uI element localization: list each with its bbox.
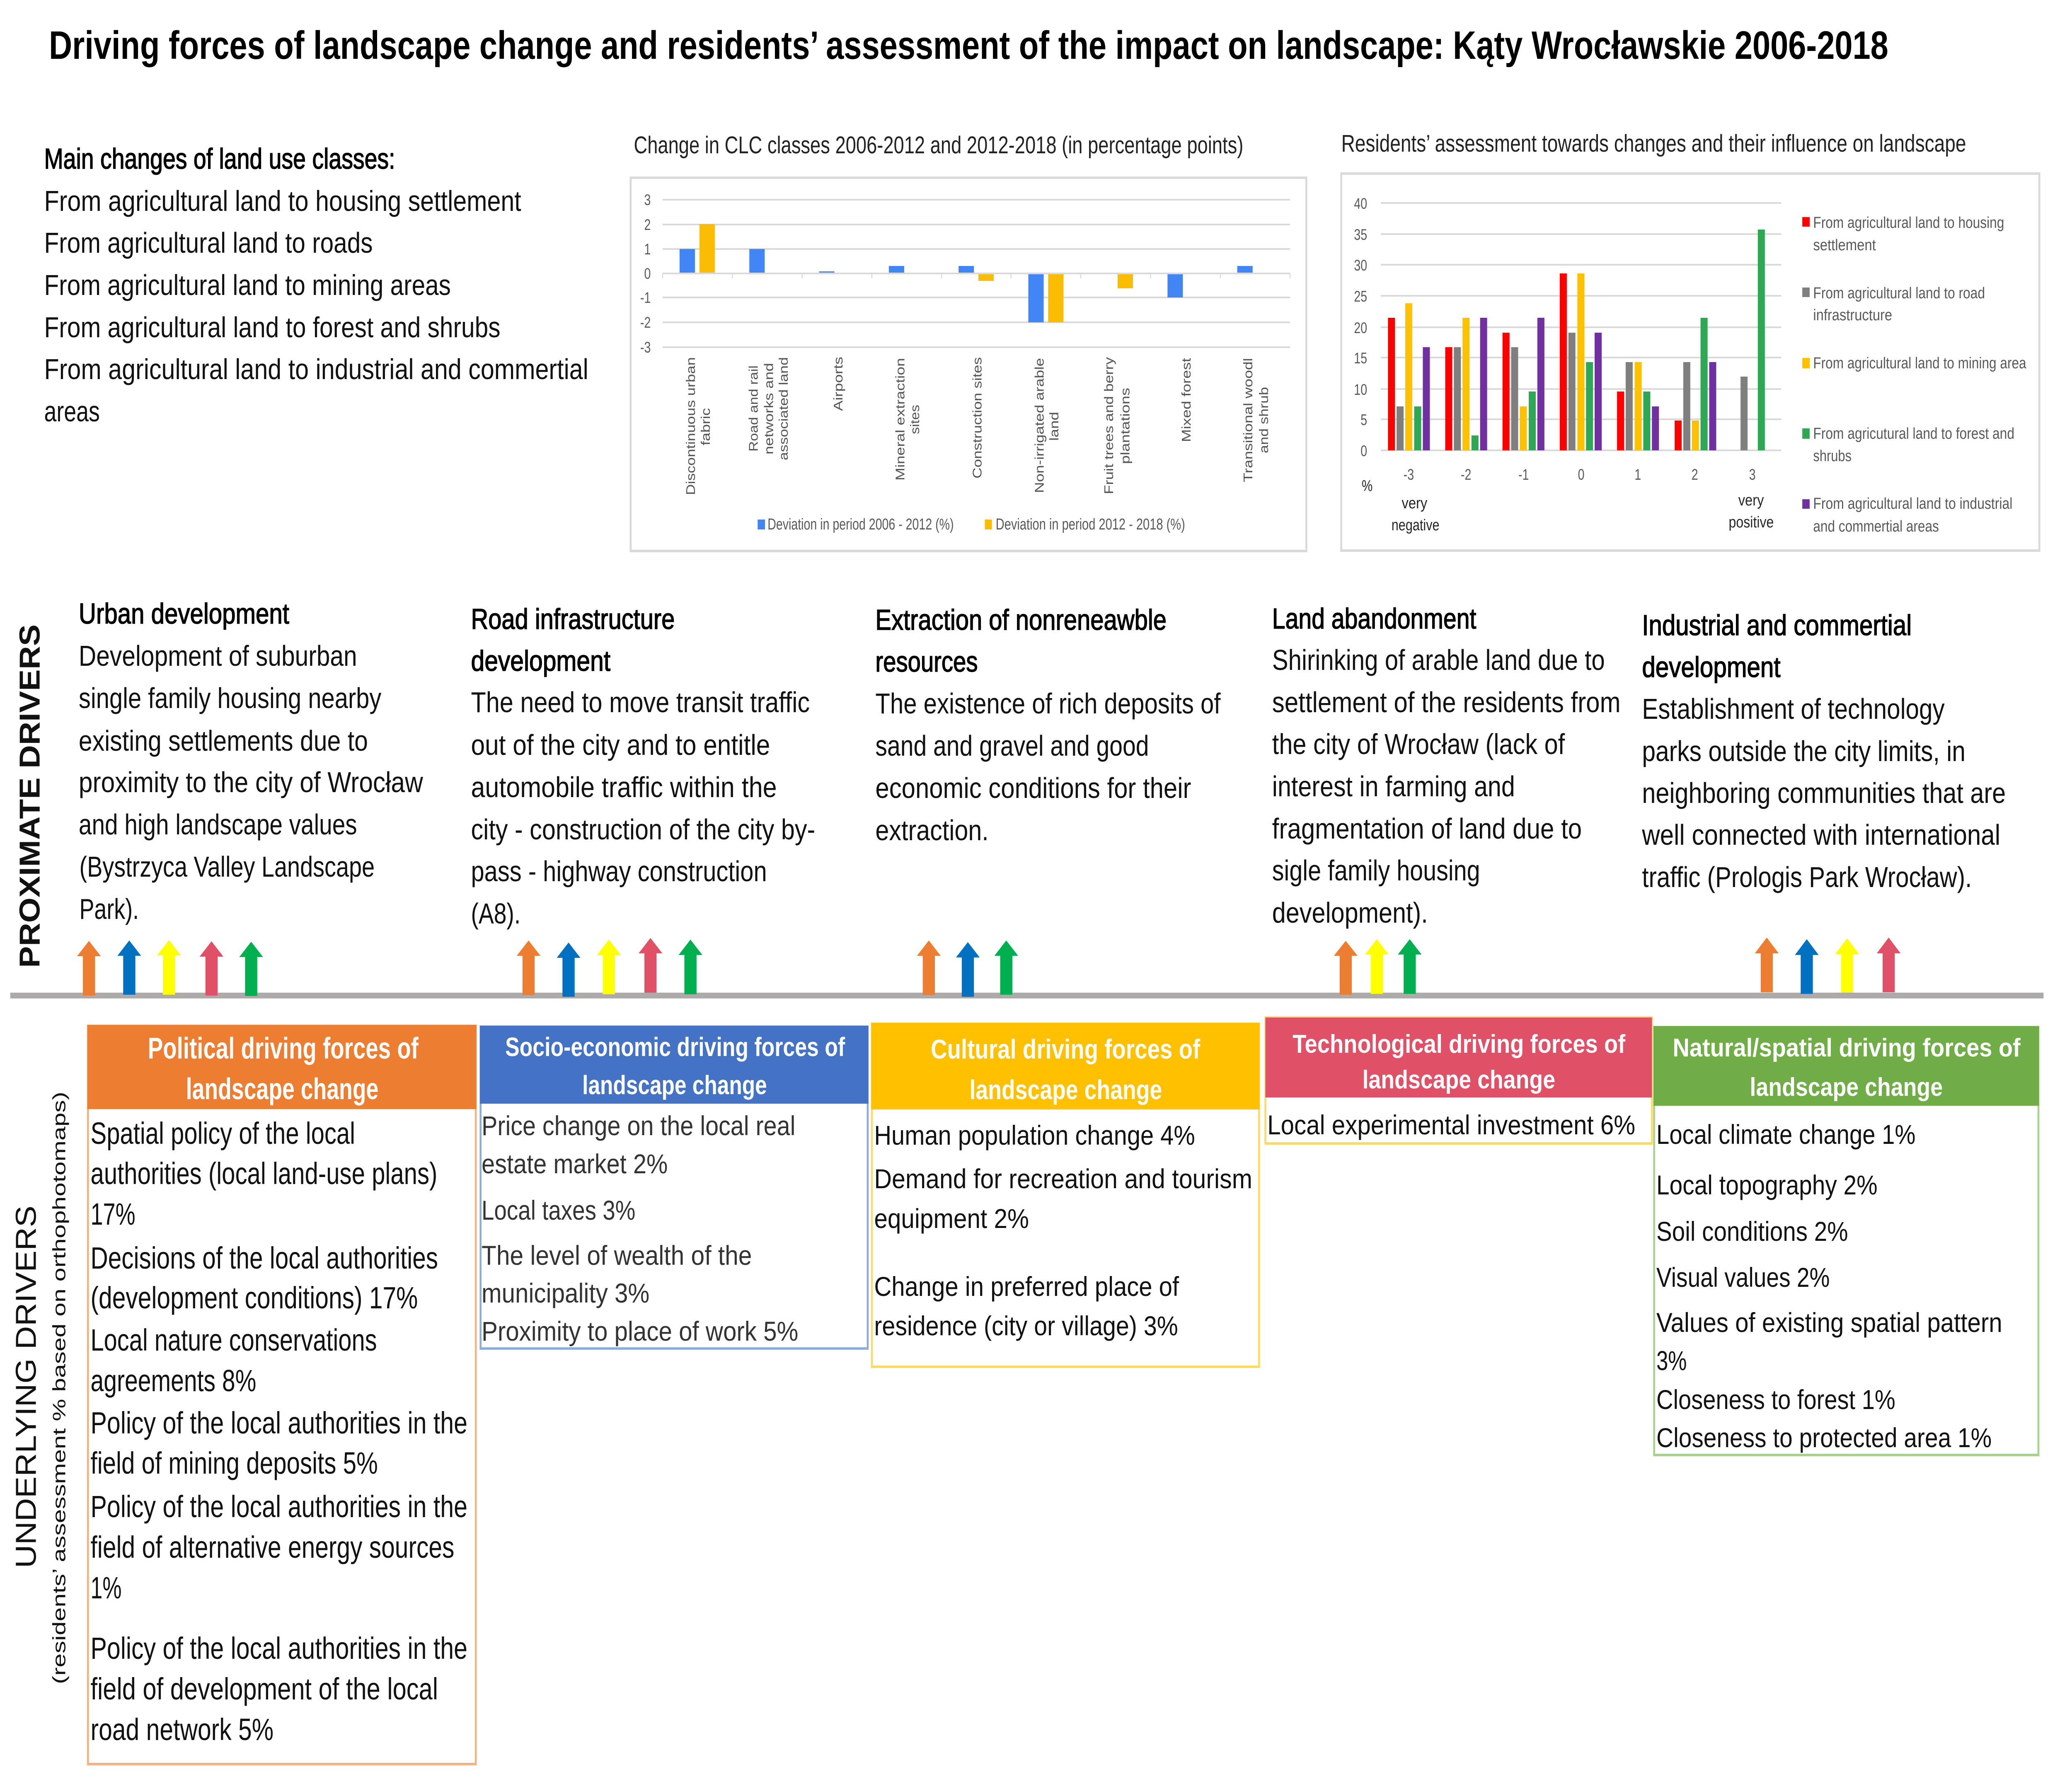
chart title: residents' assessment: Residents’ assessment towards changes and their influence on landscape bbox=[1341, 130, 1966, 157]
panel: political driving forces: Policy of the local authorities in the bbox=[90, 1490, 467, 1524]
bar chart: residents' assessment: 15 bbox=[1354, 350, 1367, 367]
text block: main changes of land use classes: From agricultural land to forest and shrubs bbox=[44, 311, 501, 344]
text block: land abandonment: Land abandonment bbox=[1272, 602, 1476, 635]
text block: main changes of land use classes: From agricultural land to housing settlement bbox=[44, 185, 521, 218]
text block: land abandonment: development). bbox=[1272, 897, 1428, 929]
text block: urban development: Urban development bbox=[79, 597, 289, 630]
panel: natural/spatial driving forces: Natural/spatial driving forces of bbox=[1673, 1033, 2021, 1062]
panel: political driving forces: Political driving forces of bbox=[148, 1032, 419, 1065]
bar chart: change in CLC classes: Fruit trees and berry bbox=[1101, 357, 1116, 494]
panel: technological driving forces bbox=[1266, 1018, 1652, 1143]
bar chart: residents' assessment: positive bbox=[1729, 513, 1774, 531]
bar chart: residents' assessment: From agricutural land to forest and bbox=[1813, 425, 2014, 442]
text block: industrial and commercial development: traffic (Prologis Park Wrocław). bbox=[1642, 861, 1972, 894]
panel: technological driving forces: landscape change bbox=[1363, 1065, 1555, 1094]
bar chart: residents' assessment: 3 bbox=[1749, 466, 1756, 483]
divider line: proximate and underlying drivers bbox=[10, 993, 2043, 998]
bar chart: change in CLC classes: -1 bbox=[640, 290, 651, 307]
panel: natural/spatial driving forces: Values of existing spatial pattern bbox=[1656, 1308, 2002, 1338]
panel: cultural driving forces: Demand for recreation and tourism bbox=[874, 1164, 1252, 1194]
panel: socio-economic driving forces: Local taxes 3% bbox=[482, 1196, 635, 1226]
text block: main changes of land use classes: From agricultural land to mining areas bbox=[44, 269, 451, 302]
panel: natural/spatial driving forces: Soil conditions 2% bbox=[1656, 1217, 1848, 1247]
panel: political driving forces: Policy of the local authorities in the bbox=[90, 1406, 467, 1441]
bar chart: change in CLC classes: fabric bbox=[699, 408, 713, 445]
bar chart: residents' assessment: -3 bbox=[1404, 466, 1414, 483]
panel: natural/spatial driving forces bbox=[1653, 1026, 2039, 1455]
bar chart: change in CLC classes: 0 bbox=[644, 266, 651, 283]
text block: industrial and commercial development: Industrial and commertial bbox=[1642, 609, 1912, 642]
text block: land abandonment: Shirinking of arable land due to bbox=[1272, 644, 1605, 677]
bar chart: change in CLC classes: Deviation in period 2012 - 2018 (%) bbox=[996, 515, 1185, 533]
text block: road infrastructure development: development bbox=[471, 645, 610, 677]
panel: socio-economic driving forces: municipality 3% bbox=[482, 1279, 649, 1309]
text block: extraction of nonrenewable resources: resources bbox=[875, 645, 978, 678]
panel: cultural driving forces: Human population change 4% bbox=[874, 1121, 1195, 1151]
bar chart: change in CLC classes bbox=[631, 178, 1306, 551]
bar chart: residents' assessment: From agricultural land to mining area bbox=[1813, 354, 2026, 372]
bar chart: change in CLC classes: land bbox=[1047, 412, 1061, 441]
bar chart: change in CLC classes: Discontinuous urban bbox=[683, 357, 698, 495]
side label: underlying drivers: UNDERLYING DRIVERS bbox=[10, 1206, 42, 1568]
panel: natural/spatial driving forces: Closeness to protected area 1% bbox=[1656, 1423, 1992, 1453]
panel: socio-economic driving forces: Price change on the local real bbox=[482, 1111, 795, 1141]
panel: political driving forces: landscape change bbox=[186, 1072, 378, 1106]
arrows: urban development bbox=[77, 940, 263, 996]
panel: technological driving forces: Local experimental investment 6% bbox=[1267, 1110, 1635, 1141]
bar chart: residents' assessment: negative bbox=[1392, 516, 1440, 534]
panel: cultural driving forces: landscape change bbox=[969, 1075, 1162, 1105]
bar chart: change in CLC classes: Transitional woodl bbox=[1241, 358, 1255, 482]
text block: urban development: Park). bbox=[79, 893, 139, 926]
panel: socio-economic driving forces: Proximity to place of work 5% bbox=[482, 1317, 798, 1347]
bar chart: change in CLC classes: plantations bbox=[1118, 388, 1132, 464]
panel: natural/spatial driving forces: Visual values 2% bbox=[1656, 1263, 1830, 1293]
bar chart: residents' assessment: From agricultural land to housing bbox=[1813, 214, 2004, 232]
bar chart: change in CLC classes: associated land bbox=[776, 357, 791, 460]
bar chart: change in CLC classes: 2 bbox=[644, 217, 651, 234]
bar chart: change in CLC classes: sites bbox=[908, 405, 922, 434]
panel: political driving forces: road network 5% bbox=[90, 1713, 274, 1747]
bar chart: change in CLC classes: and shrub bbox=[1256, 387, 1271, 453]
bar chart: change in CLC classes: Mixed forest bbox=[1179, 358, 1193, 442]
panel: cultural driving forces bbox=[871, 1023, 1260, 1367]
bar chart: change in CLC classes: Construction sites bbox=[970, 357, 985, 479]
text block: urban development: and high landscape values bbox=[79, 808, 357, 841]
text block: road infrastructure development: automobile traffic within the bbox=[471, 771, 777, 804]
panel: political driving forces: agreements 8% bbox=[90, 1364, 256, 1398]
bar chart: change in CLC classes: Deviation in period 2006 - 2012 (%) bbox=[767, 515, 954, 533]
text block: extraction of nonrenewable resources: The existence of rich deposits of bbox=[875, 687, 1221, 720]
text block: urban development bbox=[79, 597, 424, 926]
text block: industrial and commercial development bbox=[1641, 609, 2006, 894]
chart title: change in CLC classes: Change in CLC classes 2006-2012 and 2012-2018 (in percentage points) bbox=[634, 131, 1243, 158]
text block: road infrastructure development: pass - highway construction bbox=[471, 855, 767, 888]
side label: underlying drivers: (residents’ assessment % based on orthophotomaps) bbox=[49, 1092, 69, 1684]
text block: main changes of land use classes: From agricultural land to roads bbox=[44, 227, 373, 259]
text block: extraction of nonrenewable resources: sand and gravel and good bbox=[875, 730, 1149, 762]
bar chart: residents' assessment: shrubs bbox=[1813, 447, 1852, 465]
panel: political driving forces: Decisions of the local authorities bbox=[90, 1241, 438, 1276]
arrows: industrial and commercial development bbox=[1755, 938, 1900, 994]
bar chart: residents' assessment: infrastructure bbox=[1813, 306, 1892, 324]
text block: land abandonment: settlement of the residents from bbox=[1272, 686, 1621, 719]
text block: land abandonment: sigle family housing bbox=[1272, 854, 1480, 887]
text block: extraction of nonrenewable resources: economic conditions for their bbox=[875, 772, 1191, 805]
bar chart: residents' assessment: 10 bbox=[1354, 382, 1367, 399]
arrows: road infrastructure bbox=[517, 938, 702, 997]
bar chart: residents' assessment: -2 bbox=[1461, 466, 1471, 483]
bar chart: change in CLC classes: Non-irrigated arable bbox=[1032, 358, 1046, 493]
bar chart: change in CLC classes: 3 bbox=[644, 192, 651, 209]
text block: main changes of land use classes: areas bbox=[44, 395, 100, 428]
panel: political driving forces: Spatial policy of the local bbox=[90, 1117, 355, 1151]
bar chart: residents' assessment: 5 bbox=[1360, 412, 1367, 429]
text block: extraction of nonrenewable resources bbox=[875, 604, 1221, 847]
text block: main changes of land use classes bbox=[44, 143, 588, 428]
bar chart: residents' assessment: 0 bbox=[1360, 443, 1367, 460]
title: Driving forces of landscape change and residents’ assessment of the impact on landscape: Kąty Wrocławskie 2006-2018 bbox=[49, 23, 1888, 68]
text block: land abandonment: the city of Wrocław (lack of bbox=[1272, 728, 1565, 761]
bar chart: residents' assessment: 35 bbox=[1354, 227, 1367, 244]
text block: road infrastructure development: Road infrastructure bbox=[471, 603, 675, 636]
text block: road infrastructure development: (A8). bbox=[471, 897, 520, 930]
bar chart: residents' assessment: From agricultural land to industrial bbox=[1813, 495, 2012, 512]
text block: urban development: existing settlements due to bbox=[79, 725, 368, 757]
panel: political driving forces: field of alternative energy sources bbox=[90, 1530, 454, 1565]
panel: political driving forces: Local nature conservations bbox=[90, 1323, 377, 1358]
bar chart: residents' assessment: From agricultural land to road bbox=[1813, 284, 1985, 302]
bar chart: residents' assessment: 0 bbox=[1578, 466, 1585, 483]
bar chart: residents' assessment: very bbox=[1402, 494, 1427, 512]
text block: road infrastructure development: city - construction of the city by- bbox=[471, 813, 815, 846]
panel: natural/spatial driving forces: 3% bbox=[1656, 1346, 1687, 1376]
panel: political driving forces: (development conditions) 17% bbox=[90, 1281, 418, 1315]
bar chart: change in CLC classes: Airports bbox=[831, 357, 845, 411]
panel: political driving forces: 1% bbox=[90, 1571, 121, 1605]
text block: urban development: Development of suburban bbox=[79, 640, 357, 672]
bar chart: residents' assessment: 40 bbox=[1354, 196, 1367, 213]
bar chart: change in CLC classes: networks and bbox=[762, 363, 776, 454]
bar chart: change in CLC classes: -2 bbox=[640, 314, 651, 331]
text block: land abandonment bbox=[1272, 602, 1621, 929]
panel: natural/spatial driving forces: Closeness to forest 1% bbox=[1656, 1385, 1895, 1415]
bar chart: residents' assessment: 25 bbox=[1354, 288, 1367, 305]
bar chart: change in CLC classes: Mineral extraction bbox=[893, 358, 908, 481]
panel: socio-economic driving forces: Socio-economic driving forces of bbox=[505, 1032, 845, 1062]
text block: land abandonment: fragmentation of land due to bbox=[1272, 812, 1582, 845]
bar chart: residents' assessment: 2 bbox=[1692, 466, 1698, 483]
text block: industrial and commercial development: parks outside the city limits, in bbox=[1642, 735, 1965, 768]
arrows: extraction of resources bbox=[917, 940, 1018, 997]
text block: industrial and commercial development: Establishment of technology bbox=[1642, 693, 1945, 725]
bar chart: residents' assessment: settlement bbox=[1813, 236, 1876, 254]
panel: political driving forces bbox=[87, 1025, 477, 1764]
panel: cultural driving forces: Cultural driving forces of bbox=[931, 1034, 1200, 1065]
panel: political driving forces: field of mining deposits 5% bbox=[90, 1446, 378, 1481]
bar chart: change in CLC classes: 1 bbox=[644, 241, 651, 258]
bar chart: residents' assessment: 20 bbox=[1354, 320, 1367, 337]
bar chart: residents' assessment: 30 bbox=[1354, 257, 1367, 274]
text block: land abandonment: interest in farming and bbox=[1272, 770, 1515, 803]
panel: socio-economic driving forces: landscape change bbox=[582, 1071, 767, 1100]
panel: cultural driving forces: Change in preferred place of bbox=[874, 1272, 1179, 1302]
panel: natural/spatial driving forces: landscape change bbox=[1750, 1073, 1943, 1101]
panel: natural/spatial driving forces: Local topography 2% bbox=[1656, 1170, 1878, 1201]
bar chart: residents' assessment: % bbox=[1362, 477, 1372, 495]
text block: main changes of land use classes: Main changes of land use classes: bbox=[44, 143, 395, 175]
bar chart: residents' assessment: -1 bbox=[1518, 466, 1529, 483]
text block: urban development: (Bystrzyca Valley Landscape bbox=[79, 851, 375, 883]
text block: road infrastructure development: The need to move transit traffic bbox=[471, 686, 810, 719]
side label: underlying drivers bbox=[10, 1092, 69, 1684]
panel: political driving forces: authorities (local land-use plans) bbox=[90, 1157, 437, 1191]
panel: natural/spatial driving forces: Local climate change 1% bbox=[1656, 1120, 1915, 1150]
arrows: land abandonment bbox=[1334, 939, 1421, 995]
panel: socio-economic driving forces: estate market 2% bbox=[482, 1149, 668, 1179]
text block: extraction of nonrenewable resources: Extraction of nonreneawble bbox=[875, 604, 1167, 636]
text block: industrial and commercial development: development bbox=[1642, 651, 1781, 684]
panel: cultural driving forces: equipment 2% bbox=[874, 1204, 1029, 1234]
panel: cultural driving forces: residence (city or village) 3% bbox=[874, 1311, 1178, 1341]
text block: road infrastructure development: out of the city and to entitle bbox=[471, 729, 770, 761]
panel: technological driving forces: Technological driving forces of bbox=[1293, 1030, 1626, 1058]
bar chart: change in CLC classes: Road and rail bbox=[746, 365, 760, 452]
panel: political driving forces: Policy of the local authorities in the bbox=[90, 1631, 467, 1666]
text block: industrial and commercial development: well connected with international bbox=[1641, 819, 2000, 851]
text block: extraction of nonrenewable resources: extraction. bbox=[875, 814, 989, 847]
text block: urban development: proximity to the city of Wrocław bbox=[79, 766, 424, 799]
panel: political driving forces: 17% bbox=[90, 1197, 136, 1232]
bar chart: residents' assessment: 1 bbox=[1634, 466, 1641, 483]
bar chart: residents' assessment bbox=[1341, 174, 2039, 551]
bar chart: residents' assessment: very bbox=[1738, 491, 1764, 509]
text block: road infrastructure development bbox=[471, 603, 815, 930]
bar chart: change in CLC classes: -3 bbox=[640, 339, 651, 356]
bar chart: residents' assessment: and commertial areas bbox=[1813, 517, 1939, 535]
panel: socio-economic driving forces: The level of wealth of the bbox=[482, 1241, 752, 1271]
text block: main changes of land use classes: From agricultural land to industrial and commertial bbox=[44, 353, 588, 386]
text block: urban development: single family housing nearby bbox=[79, 682, 382, 715]
panel: socio-economic driving forces bbox=[480, 1026, 868, 1349]
side label: proximate drivers: PROXIMATE DRIVERS bbox=[14, 624, 46, 968]
panel: political driving forces: field of development of the local bbox=[90, 1672, 438, 1706]
text block: industrial and commercial development: neighboring communities that are bbox=[1642, 777, 2006, 810]
